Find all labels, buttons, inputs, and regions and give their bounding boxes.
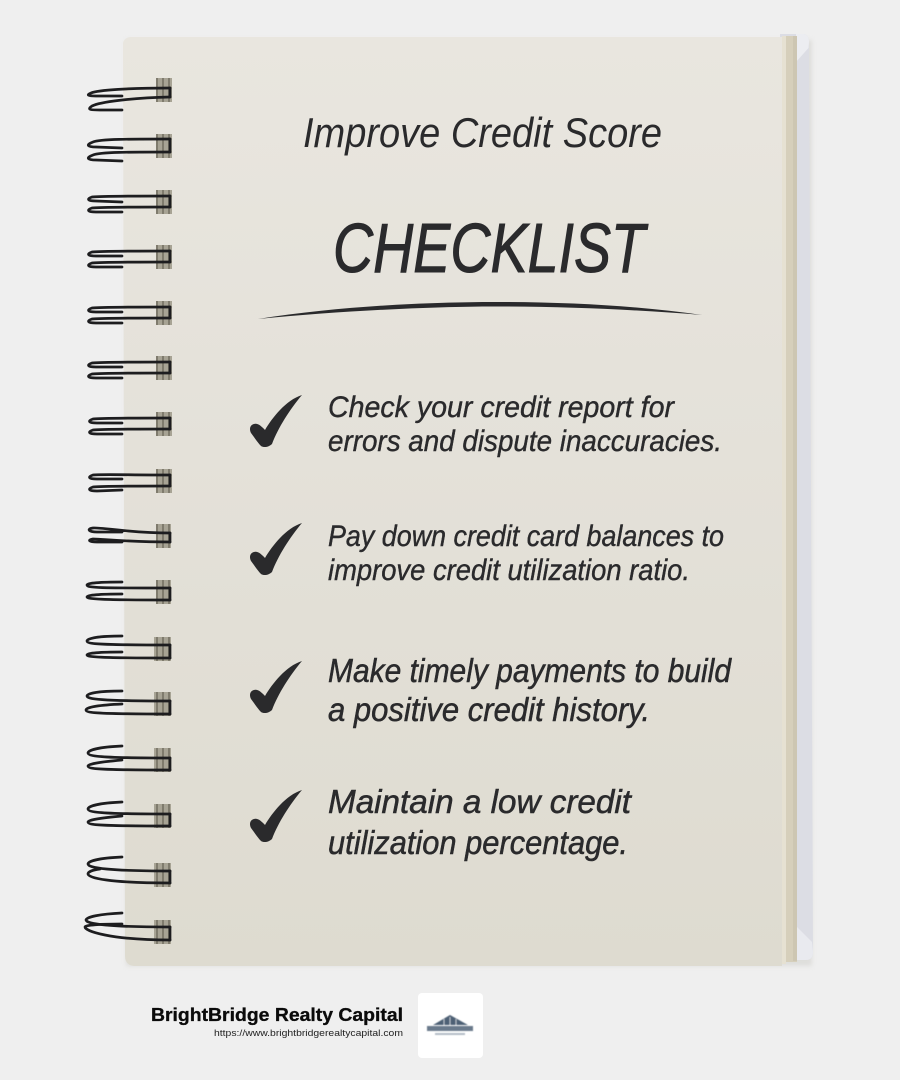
item text	[328, 520, 724, 587]
notebook shadow	[126, 40, 812, 966]
item text: errors and dispute inaccuracies.	[328, 425, 722, 458]
item text	[328, 652, 732, 728]
ring 11	[87, 636, 171, 661]
ring 7	[90, 412, 172, 436]
checklist item 3	[250, 652, 732, 728]
brand url: https://www.brightbridgerealtycapital.com	[214, 1028, 403, 1039]
heading: CHECKLIST: CHECKLIST	[333, 209, 648, 287]
ring 10	[87, 580, 171, 604]
ring 5	[89, 301, 172, 325]
ring 6	[89, 356, 172, 380]
footer brand	[151, 993, 483, 1058]
logo tile	[418, 993, 483, 1058]
item text: Check your credit report for	[328, 391, 675, 424]
item text: Make timely payments to build	[328, 652, 732, 689]
icon: check mark	[250, 790, 302, 842]
icon: check mark	[250, 661, 302, 713]
subtitle: Improve Credit Score: Improve Credit Score	[303, 109, 662, 156]
page stack	[782, 36, 797, 964]
item text	[328, 391, 722, 458]
notebook	[123, 34, 813, 966]
brand name: BrightBridge Realty Capital	[151, 1005, 403, 1025]
ring 9	[89, 524, 171, 548]
ring 12	[86, 691, 171, 716]
ring 14	[88, 802, 171, 828]
ring 15	[88, 857, 171, 887]
ring 13	[88, 746, 171, 772]
item text: Maintain a low credit	[328, 783, 633, 820]
icon: check mark	[250, 395, 302, 447]
item text: a positive credit history.	[328, 691, 650, 728]
front page	[123, 37, 782, 966]
ring 8	[90, 469, 172, 493]
ring 1	[88, 78, 172, 110]
item text: improve credit utilization ratio.	[328, 554, 690, 587]
ring 3	[89, 190, 172, 214]
ring 4	[89, 245, 172, 269]
ring 16	[85, 913, 171, 944]
back cover	[780, 34, 813, 960]
underline swoosh	[258, 302, 702, 319]
checklist item 4	[250, 783, 633, 861]
item text: Pay down credit card balances to	[328, 520, 724, 553]
checklist item 1	[250, 391, 722, 458]
item text: utilization percentage.	[328, 824, 628, 861]
icon: check mark	[250, 523, 302, 575]
checklist item 2	[250, 520, 724, 587]
ring 2	[88, 134, 172, 161]
item text	[328, 783, 633, 861]
spiral binding	[85, 78, 172, 944]
